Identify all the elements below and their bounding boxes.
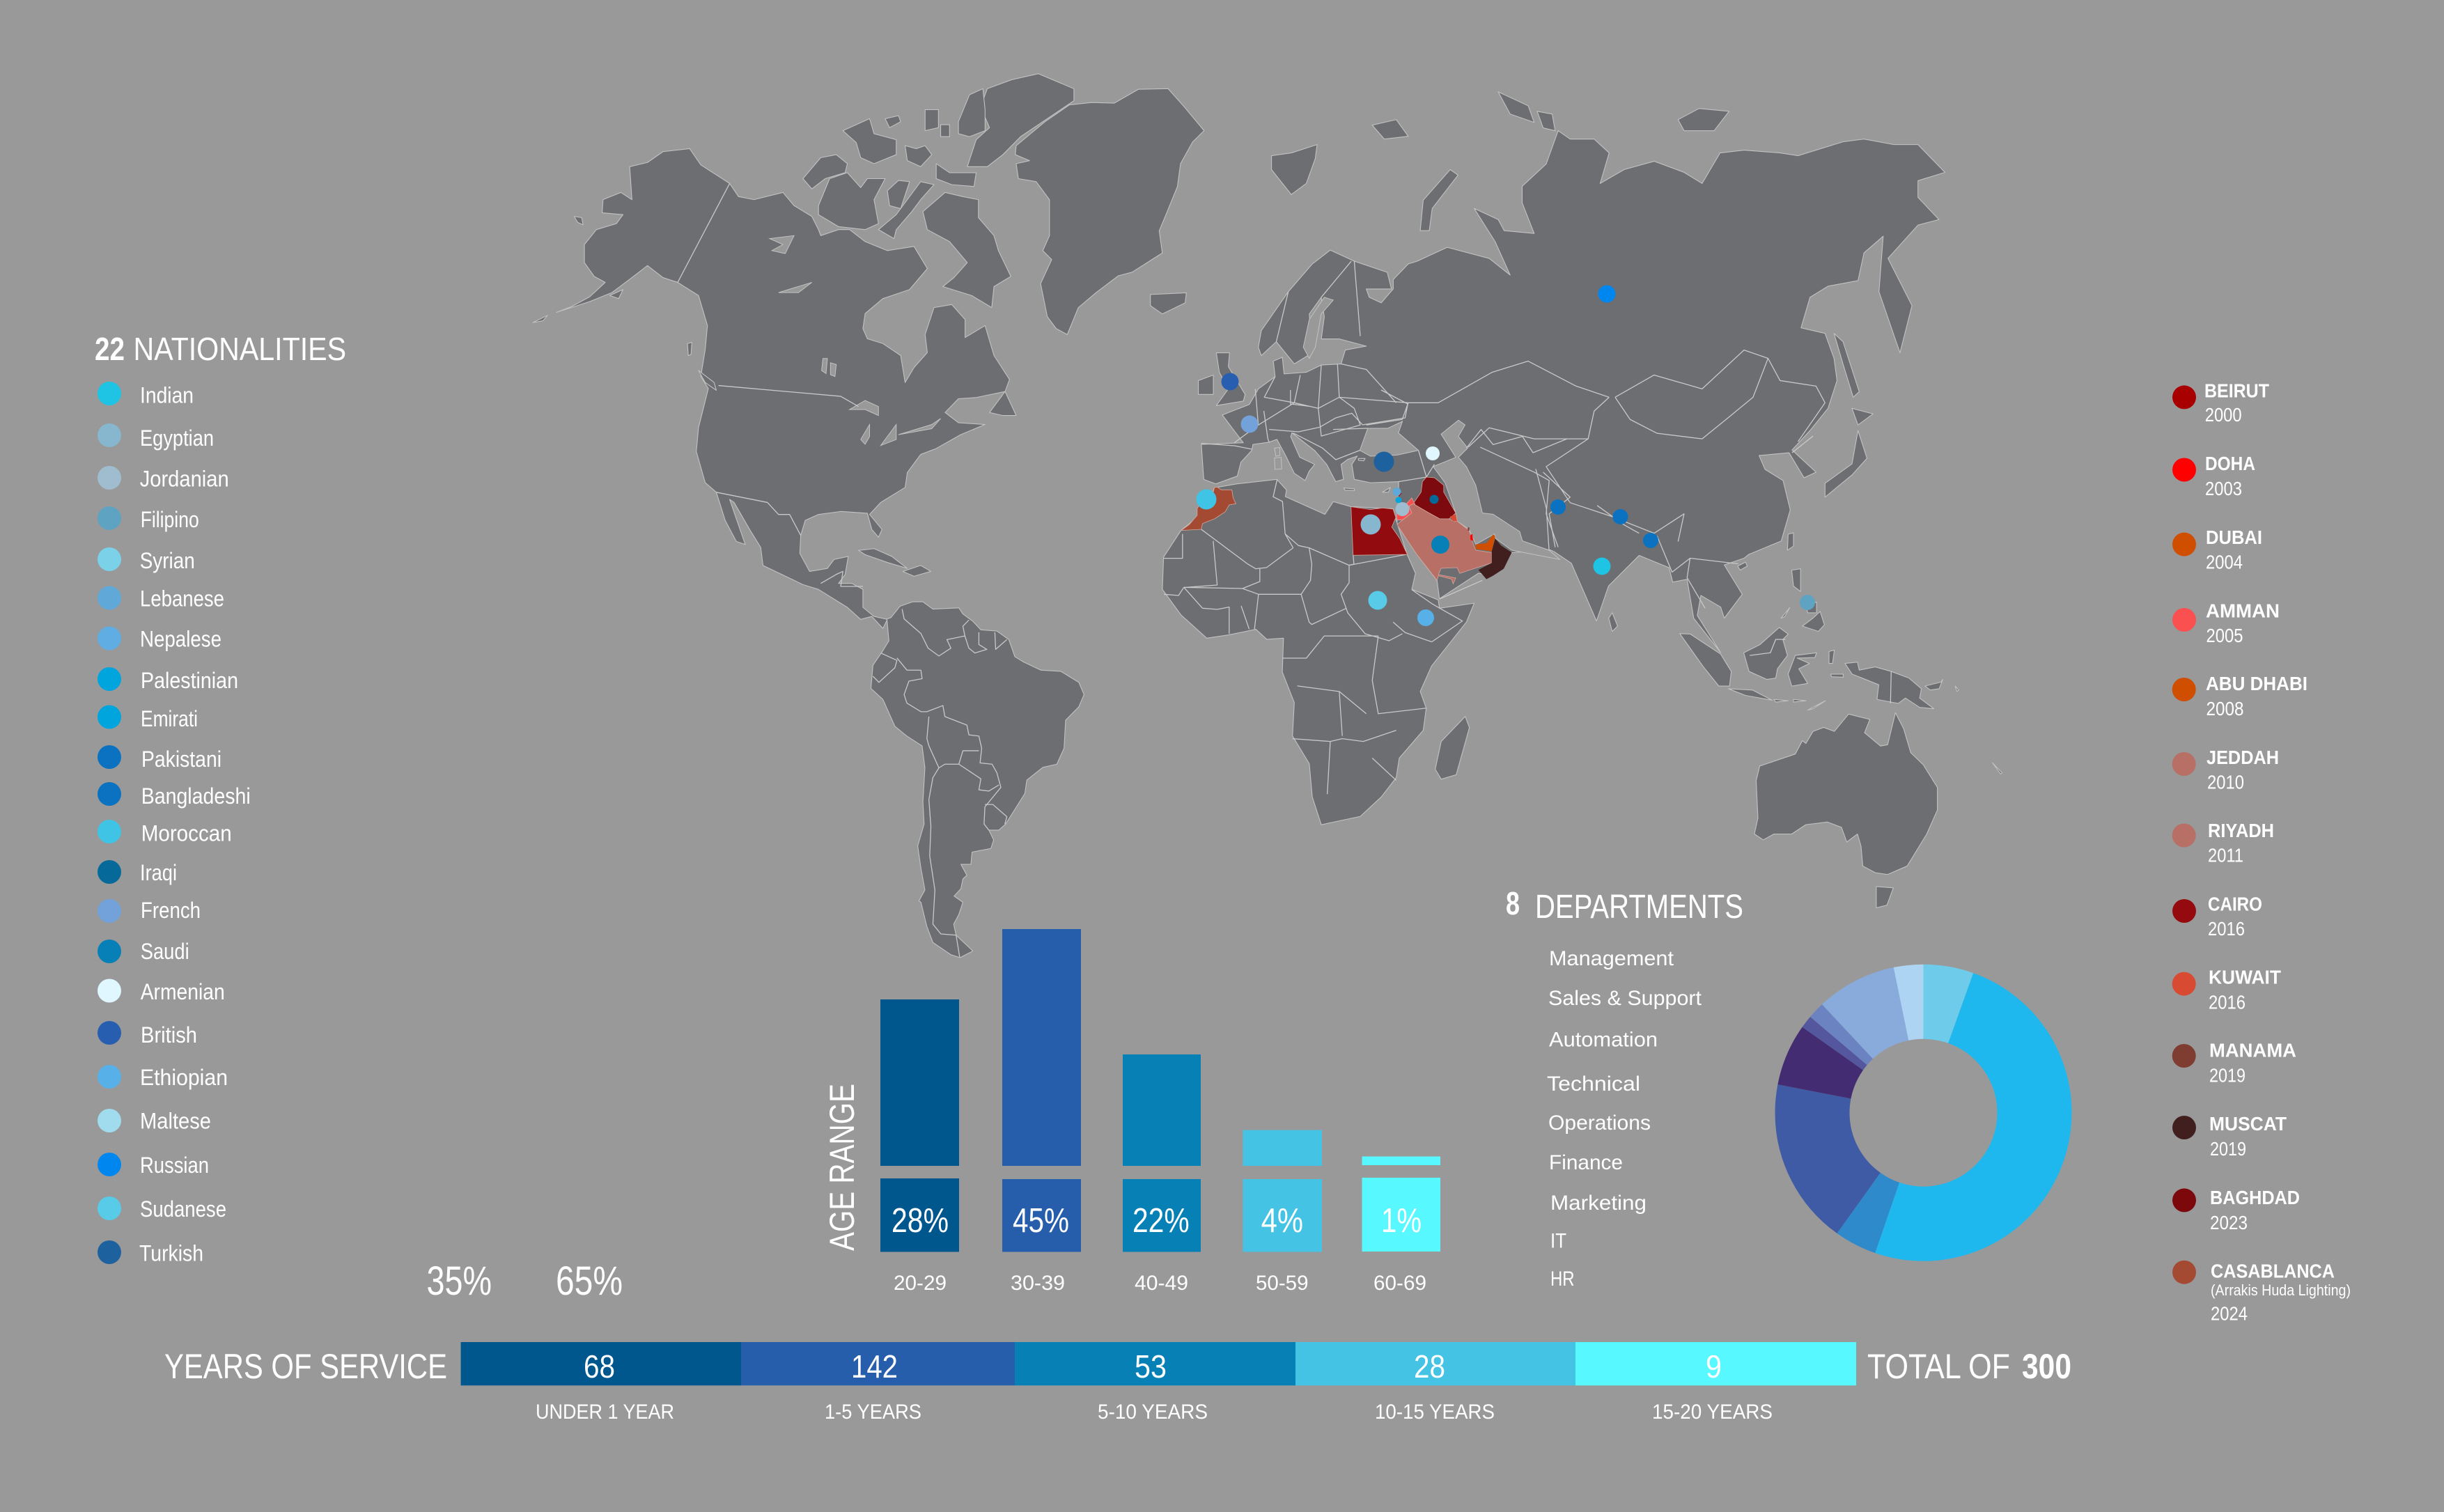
age group 60-69: 1% xyxy=(1381,1202,1422,1240)
legend item: Palestinian xyxy=(98,667,238,693)
legend item: Sudanese xyxy=(98,1197,226,1222)
country: Lebanon xyxy=(1399,493,1402,497)
legend item: Jordanian: Jordanian xyxy=(140,467,229,492)
age group 50-59: 50-59 xyxy=(1256,1272,1308,1295)
list: departments: Technical xyxy=(1547,1073,1640,1096)
office: Cairo: CAIRO xyxy=(2208,893,2262,914)
office: Riyadh: RIYADH xyxy=(2208,820,2274,841)
office: Baghdad xyxy=(2172,1187,2300,1233)
office: Manama: MANAMA xyxy=(2209,1040,2296,1061)
list: departments: IT xyxy=(1550,1230,1566,1252)
age group 30-39 xyxy=(1002,929,1081,1295)
country: Saudi Arabia xyxy=(1397,504,1492,584)
office: Beirut: BEIRUT xyxy=(2204,380,2269,401)
heading: 8 departments: DEPARTMENTS xyxy=(1535,889,1743,926)
legend item: Sudanese: Sudanese xyxy=(140,1197,226,1222)
office: Beirut xyxy=(2172,380,2269,426)
office: Abu Dhabi: ABU DHABI xyxy=(2206,673,2307,694)
age group 60-69 xyxy=(1362,1156,1440,1295)
legend item: Russian: Russian xyxy=(140,1153,209,1178)
legend item: Moroccan: Moroccan xyxy=(141,820,232,845)
age group 40-49: 40-49 xyxy=(1135,1272,1188,1295)
age group 20-29: 28% xyxy=(892,1202,949,1240)
age group 20-29 xyxy=(880,999,959,1295)
segment: 10-15 years: 28 xyxy=(1414,1348,1445,1385)
legend item: Pakistani xyxy=(98,745,221,772)
legend item: Emirati xyxy=(98,705,198,731)
segment: 15-20 years: 15-20 YEARS xyxy=(1652,1401,1773,1424)
list: departments: Marketing xyxy=(1550,1192,1647,1215)
legend item: Indian: Indian xyxy=(140,383,194,408)
legend item: Armenian: Armenian xyxy=(141,979,225,1004)
office: Kuwait: 2016 xyxy=(2209,991,2245,1013)
legend: nationalities xyxy=(98,382,251,1266)
legend item: Lebanese xyxy=(98,586,224,611)
legend item: Bangladeshi: Bangladeshi xyxy=(141,784,251,809)
legend item: Turkish xyxy=(98,1240,203,1266)
office: Jeddah: 2010 xyxy=(2207,772,2244,793)
legend item: Egyptian: Egyptian xyxy=(140,426,214,451)
age group 30-39: 45% xyxy=(1013,1202,1069,1240)
axis title: age range: AGE RANGE xyxy=(823,1084,862,1251)
legend item: French: French xyxy=(141,898,201,923)
legend item: Palestinian: Palestinian xyxy=(141,668,238,693)
gender percentages: 35% xyxy=(426,1258,492,1304)
legend item: Saudi: Saudi xyxy=(141,939,189,964)
legend item: Iraqi: Iraqi xyxy=(140,860,177,885)
country: UAE xyxy=(1476,534,1495,552)
legend item: Bangladeshi xyxy=(98,782,251,809)
office: Riyadh xyxy=(2172,820,2274,866)
office: Beirut: 2000 xyxy=(2205,404,2242,426)
legend item: Armenian xyxy=(98,979,225,1004)
legend item: Iraqi xyxy=(98,860,177,885)
legend item: Ethiopian xyxy=(98,1065,228,1090)
office: Cairo xyxy=(2172,893,2262,940)
age group 50-59: 4% xyxy=(1261,1202,1303,1240)
age group 30-39: 30-39 xyxy=(1011,1272,1065,1295)
office: Casablanca: CASABLANCA xyxy=(2211,1261,2335,1281)
legend item: French xyxy=(98,898,201,923)
legend item: British: British xyxy=(141,1022,197,1047)
gender percentages xyxy=(426,1258,623,1304)
legend item: Filipino xyxy=(98,506,199,532)
segment: 10-15 years xyxy=(1295,1342,1575,1424)
list: departments: HR xyxy=(1550,1268,1575,1291)
legend item: Jordanian xyxy=(98,466,229,492)
legend item: Lebanese: Lebanese xyxy=(140,586,224,611)
legend item: Syrian: Syrian xyxy=(140,548,195,573)
office: Abu Dhabi: 2008 xyxy=(2206,698,2244,719)
label: years of service: YEARS OF SERVICE xyxy=(164,1347,447,1386)
segment: 5-10 years: 5-10 YEARS xyxy=(1098,1401,1208,1424)
office: Dubai xyxy=(2172,527,2262,572)
office: Doha: DOHA xyxy=(2205,453,2255,474)
office: Cairo: 2016 xyxy=(2208,918,2245,940)
office: Kuwait xyxy=(2172,967,2281,1013)
map dots: nationalities xyxy=(1197,286,1815,626)
office: Dubai: DUBAI xyxy=(2206,527,2262,548)
office: Muscat: 2019 xyxy=(2210,1138,2246,1160)
heading: 8 departments xyxy=(1506,885,1743,926)
country: Egypt xyxy=(1351,507,1407,555)
office: Amman xyxy=(2172,600,2280,646)
legend item: Pakistani: Pakistani xyxy=(141,747,221,772)
office: Muscat: MUSCAT xyxy=(2209,1113,2287,1135)
legend item: British xyxy=(98,1021,197,1047)
list: departments: Operations xyxy=(1548,1112,1651,1135)
list: departments xyxy=(1547,947,1702,1291)
office: Casablanca: (Arrakis Huda Lighting) xyxy=(2211,1281,2351,1299)
list: departments: Management xyxy=(1549,947,1674,970)
legend item: Syrian xyxy=(98,547,195,573)
legend item: Russian xyxy=(98,1153,209,1178)
office: Casablanca xyxy=(2172,1261,2351,1325)
world map xyxy=(533,74,2002,958)
map: Middle East and North Africa detail xyxy=(1164,390,1567,642)
office: Jeddah xyxy=(2172,747,2279,793)
legend item: Indian xyxy=(98,382,194,408)
office: Abu Dhabi xyxy=(2172,673,2307,719)
segment: 15-20 years xyxy=(1575,1342,1856,1424)
heading: 22 nationalities: NATIONALITIES xyxy=(134,331,346,367)
heading: 8 departments: 8 xyxy=(1506,885,1520,921)
office: Baghdad: 2023 xyxy=(2210,1212,2248,1233)
segment: 1-5 years xyxy=(741,1342,1015,1424)
office: Jeddah: JEDDAH xyxy=(2206,747,2279,768)
office: Amman: AMMAN xyxy=(2206,600,2280,621)
country: Morocco xyxy=(1181,487,1236,531)
chart: age range bars xyxy=(823,929,1440,1295)
country: Bahrain xyxy=(1468,527,1470,531)
legend item: Emirati: Emirati xyxy=(141,706,198,731)
legend item: Filipino: Filipino xyxy=(141,507,199,532)
map: Southeast Asia and Oceania xyxy=(1609,533,2002,908)
legend item: Turkish: Turkish xyxy=(139,1241,203,1266)
office: Amman: 2005 xyxy=(2206,625,2243,646)
country: Oman xyxy=(1479,538,1511,579)
office: Riyadh: 2011 xyxy=(2208,845,2243,866)
office: Doha: 2003 xyxy=(2205,478,2242,499)
heading: 22 nationalities: 22 xyxy=(95,331,125,367)
legend item: Nepalese xyxy=(98,627,221,652)
map: North America and Greenland xyxy=(533,74,1204,628)
segment: 15-20 years: 9 xyxy=(1706,1348,1722,1385)
country: Iraq xyxy=(1413,477,1456,519)
office: Manama xyxy=(2172,1040,2296,1086)
office: Muscat xyxy=(2172,1113,2287,1160)
office: Manama: 2019 xyxy=(2209,1064,2245,1086)
office: Dubai: 2004 xyxy=(2206,551,2243,572)
segment: under 1 year: 68 xyxy=(584,1348,615,1385)
segment: 5-10 years xyxy=(1015,1342,1295,1424)
list: departments: Automation xyxy=(1549,1029,1658,1052)
segment: 10-15 years: 10-15 YEARS xyxy=(1375,1401,1495,1424)
map: Eurasia and Africa xyxy=(1151,92,1945,825)
age group 40-49: 22% xyxy=(1133,1202,1190,1240)
office: Kuwait: KUWAIT xyxy=(2209,967,2281,988)
country: Kuwait xyxy=(1450,514,1457,521)
segment: under 1 year: UNDER 1 YEAR xyxy=(536,1401,674,1424)
age group 20-29: 20-29 xyxy=(894,1272,947,1295)
office: Baghdad: BAGHDAD xyxy=(2210,1187,2300,1208)
segment: 5-10 years: 53 xyxy=(1135,1348,1167,1385)
office: Casablanca: 2024 xyxy=(2211,1303,2248,1325)
office: Doha xyxy=(2172,453,2255,499)
legend item: Moroccan xyxy=(98,820,232,845)
legend item: Egyptian xyxy=(98,423,214,451)
list: departments: Sales & Support xyxy=(1548,987,1702,1010)
list: departments: Finance xyxy=(1549,1151,1623,1174)
segment: 1-5 years: 1-5 YEARS xyxy=(825,1401,921,1424)
gender percentages: 65% xyxy=(556,1258,623,1304)
country: Qatar xyxy=(1470,534,1473,541)
legend item: Nepalese: Nepalese xyxy=(140,627,221,652)
label: total of 300: TOTAL OF xyxy=(1867,1347,2010,1386)
legend: offices by city and year xyxy=(2172,380,2351,1325)
legend item: Maltese xyxy=(98,1109,211,1134)
legend item: Ethiopian: Ethiopian xyxy=(140,1065,228,1090)
age group 60-69: 60-69 xyxy=(1373,1272,1426,1295)
age group 40-49 xyxy=(1123,1054,1201,1295)
chart: years of service xyxy=(164,1342,2071,1424)
label: total of 300: 300 xyxy=(2022,1347,2071,1386)
age group 50-59 xyxy=(1243,1130,1322,1295)
segment: 1-5 years: 142 xyxy=(851,1348,898,1385)
legend item: Maltese: Maltese xyxy=(140,1109,211,1134)
segment: under 1 year xyxy=(461,1342,741,1424)
chart: departments donut xyxy=(1812,1001,2034,1224)
country: Jordan xyxy=(1396,498,1415,520)
legend item: Saudi xyxy=(98,939,189,964)
map: South America xyxy=(871,602,1084,958)
